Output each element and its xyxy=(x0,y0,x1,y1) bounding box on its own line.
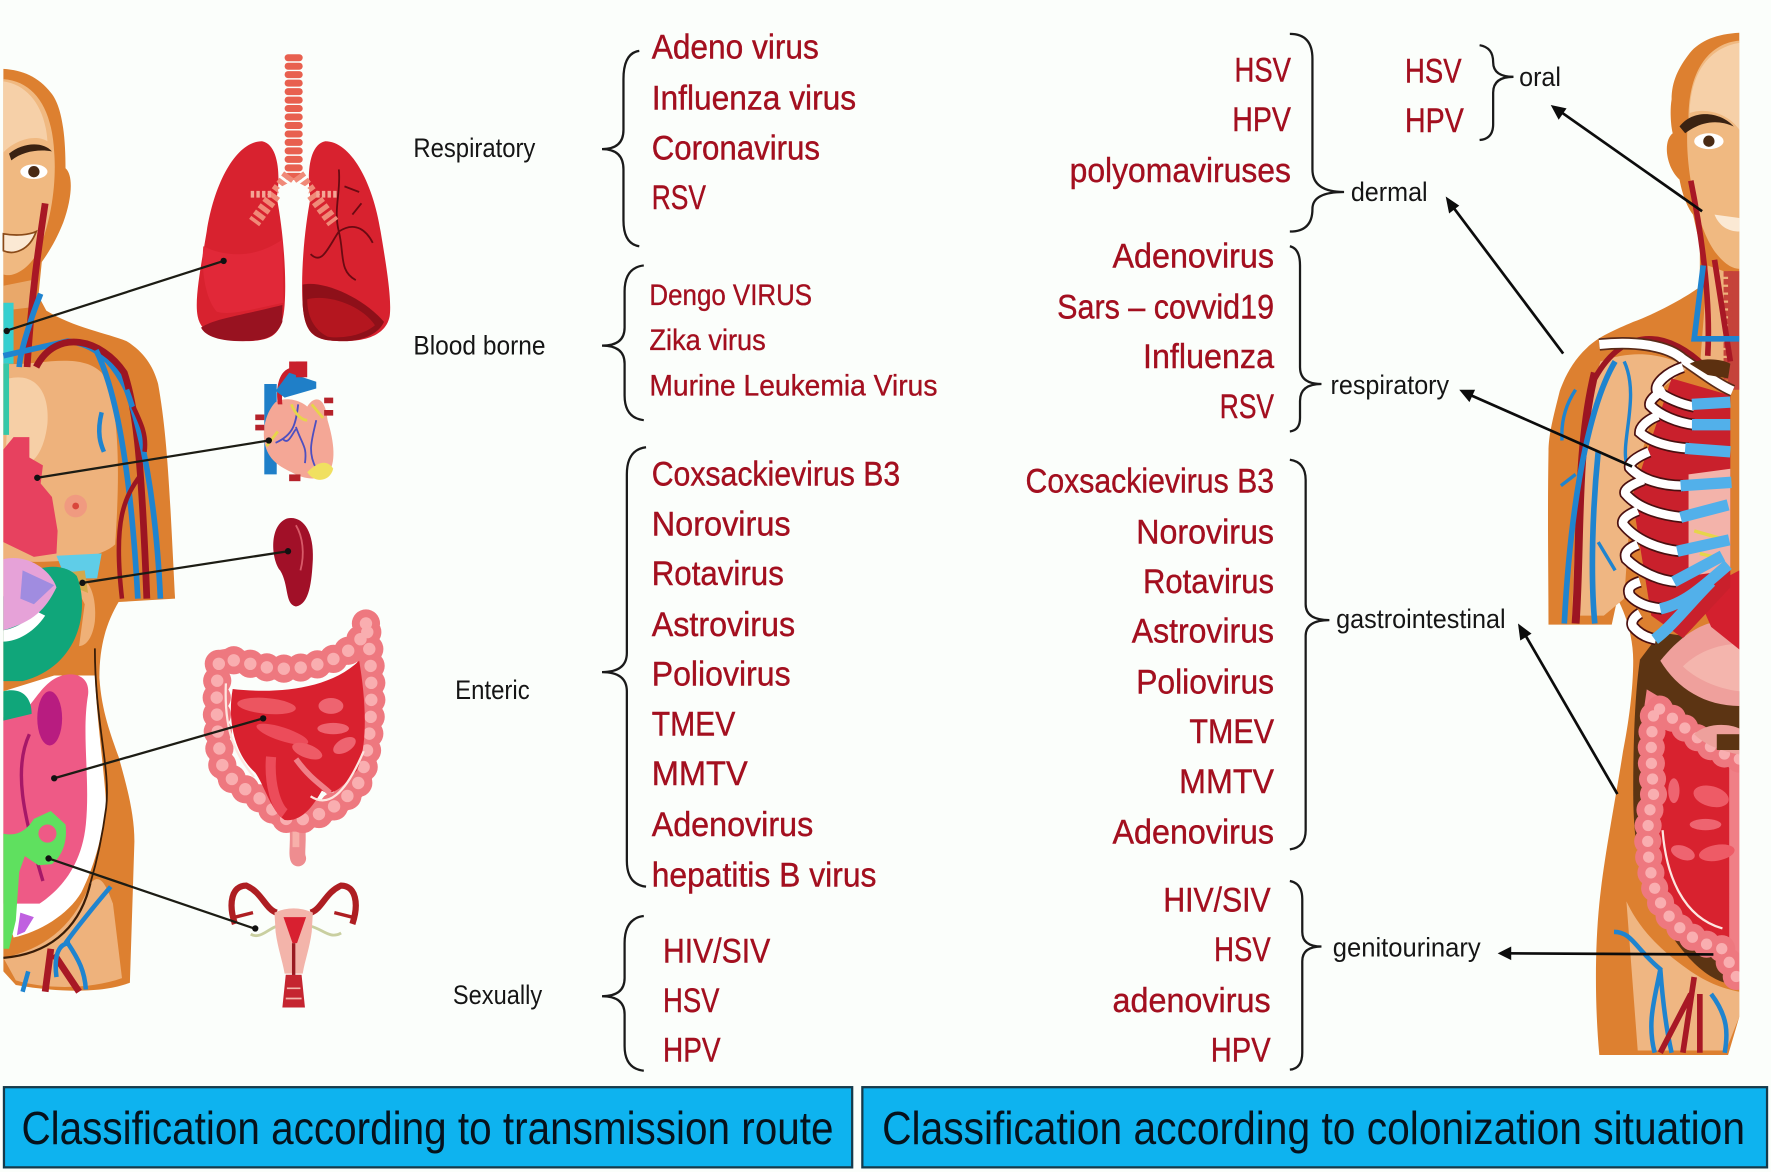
virus list: blood borne: Murine Leukemia Virus xyxy=(649,369,937,402)
virus list: enteric: Rotavirus xyxy=(652,555,784,593)
virus list: gastrointestinal: Coxsackievirus B3 xyxy=(1026,462,1274,500)
clavicle xyxy=(1599,343,1733,391)
category labels: colonization sites: dermal xyxy=(1351,177,1428,207)
virus list: enteric: TMEV xyxy=(652,705,736,743)
body silhouette xyxy=(3,69,175,991)
nipple xyxy=(64,495,87,517)
virus list: respiratory xyxy=(652,29,856,217)
virus list: enteric: Norovirus xyxy=(652,505,791,543)
virus list: enteric xyxy=(652,456,900,895)
category labels: colonization sites: gastrointestinal xyxy=(1336,604,1506,634)
category labels: transmission routes: Respiratory xyxy=(413,133,536,163)
arrow: genitourinary xyxy=(1498,947,1713,960)
category labels: colonization sites xyxy=(1331,62,1561,963)
large intestine xyxy=(1648,706,1739,983)
lower body xyxy=(3,879,122,987)
illustration: left half human body xyxy=(3,69,175,992)
arm vessels xyxy=(36,342,147,599)
virus list: gastrointestinal xyxy=(1026,462,1274,852)
virus list: sexually xyxy=(663,932,771,1070)
ribs xyxy=(1623,367,1694,639)
category labels: transmission routes: Blood borne xyxy=(413,331,546,361)
virus list: genitourinary: HPV xyxy=(1211,1032,1271,1070)
illustration: spleen xyxy=(273,518,313,607)
arrow: respiratory xyxy=(1459,390,1632,466)
eye and brow xyxy=(9,144,52,160)
arrow: oral xyxy=(1551,105,1702,211)
virus list: genitourinary: HSV xyxy=(1214,931,1271,969)
organ: heart shape xyxy=(3,437,58,557)
virus list: enteric: hepatitis B virus xyxy=(652,857,876,895)
virus list: gastrointestinal: Poliovirus xyxy=(1136,664,1274,702)
illustration: heart xyxy=(255,361,334,481)
virus list: enteric: Coxsackievirus B3 xyxy=(652,456,900,494)
rib cartilage xyxy=(1655,402,1731,639)
illustration: intestines xyxy=(217,624,371,858)
colon ring xyxy=(217,624,371,820)
category labels: transmission routes: Enteric xyxy=(455,675,530,705)
virus list: sexually: HIV/SIV xyxy=(663,932,771,970)
virus list: genitourinary: HIV/SIV xyxy=(1163,882,1271,920)
banner: colonization situation xyxy=(862,1087,1767,1167)
category labels: colonization sites: oral xyxy=(1519,62,1561,92)
banner: transmission route xyxy=(4,1087,852,1167)
virus list: colonization respiratory xyxy=(1057,238,1274,426)
virus list: respiratory: Coronavirus xyxy=(652,129,820,167)
trachea xyxy=(285,54,303,180)
category labels: transmission routes: Sexually xyxy=(453,980,543,1010)
virus list: respiratory: RSV xyxy=(652,179,706,217)
white abdomen xyxy=(3,675,106,938)
silhouette xyxy=(1548,33,1739,1055)
organ: liver and stomach xyxy=(56,553,102,578)
virus list: blood borne xyxy=(649,279,937,402)
virus list: sexually: HSV xyxy=(663,982,720,1020)
virus list: enteric: Adenovirus xyxy=(652,806,813,844)
virus list: dermal xyxy=(1070,51,1291,190)
virus list: dermal: HSV xyxy=(1235,51,1291,89)
virus list: gastrointestinal: Norovirus xyxy=(1136,513,1274,551)
arm skin xyxy=(1572,354,1689,616)
arrow: dermal xyxy=(1446,197,1563,354)
neck spine xyxy=(3,303,14,364)
virus list: sexually: HPV xyxy=(663,1032,721,1070)
virus list: oral xyxy=(1405,52,1464,140)
thigh skin and vessels xyxy=(1626,901,1739,1050)
background mask at right edge xyxy=(1739,0,1771,1084)
face xyxy=(1687,41,1739,269)
banner: transmission route: Classification according to transmission route xyxy=(21,1102,834,1154)
pointer lines left xyxy=(4,258,291,932)
liver and stomach xyxy=(1660,621,1739,706)
virus list: enteric: Astrovirus xyxy=(652,606,795,644)
virus list: enteric: MMTV xyxy=(652,755,748,793)
arrow: gastrointestinal xyxy=(1518,624,1617,794)
illustration: lungs xyxy=(197,54,390,341)
virus list: respiratory: Adeno virus xyxy=(652,29,819,67)
virus list: genitourinary: adenovirus xyxy=(1113,982,1271,1020)
virus list: gastrointestinal: Adenovirus xyxy=(1113,814,1274,852)
category labels: colonization sites: respiratory xyxy=(1331,370,1450,400)
virus list: colonization respiratory: Adenovirus xyxy=(1113,238,1274,276)
virus list: gastrointestinal: Rotavirus xyxy=(1143,563,1274,601)
illustration: right half human body xyxy=(1548,33,1739,1055)
virus list: enteric: Poliovirus xyxy=(652,656,791,694)
virus list: oral: HSV xyxy=(1405,52,1462,90)
illustration: uterus xyxy=(232,886,356,1008)
virus list: gastrointestinal: TMEV xyxy=(1189,713,1274,751)
organ: intestines xyxy=(3,674,88,904)
virus list: gastrointestinal: MMTV xyxy=(1179,763,1274,801)
virus list: oral: HPV xyxy=(1405,102,1464,140)
category labels: colonization sites: genitourinary xyxy=(1333,933,1481,963)
virus list: gastrointestinal: Astrovirus xyxy=(1132,613,1274,651)
bronchi xyxy=(254,175,333,223)
body cavity xyxy=(1633,633,1739,985)
neck xyxy=(1700,265,1739,367)
virus list: colonization respiratory: RSV xyxy=(1220,388,1274,426)
chest skin xyxy=(3,361,118,562)
virus list: blood borne: Zika virus xyxy=(649,324,766,357)
neck vessels xyxy=(27,203,45,367)
face skin xyxy=(3,79,55,275)
virus list: dermal: polyomaviruses xyxy=(1070,152,1291,190)
organ: uterus shape xyxy=(3,811,66,949)
category labels: transmission routes xyxy=(413,133,546,1010)
small intestine xyxy=(231,661,365,820)
braces left xyxy=(602,51,646,1071)
virus list: colonization respiratory: Influenza xyxy=(1143,338,1274,376)
lungs under ribs xyxy=(1632,378,1730,638)
virus list: respiratory: Influenza virus xyxy=(652,80,856,118)
virus list: dermal: HPV xyxy=(1232,101,1291,139)
arm vessels xyxy=(1576,373,1595,624)
virus list: genitourinary xyxy=(1113,882,1271,1070)
virus list: colonization respiratory: Sars – covvid19 xyxy=(1057,289,1274,327)
braces right xyxy=(1290,34,1513,1070)
virus list: blood borne: Dengo VIRUS xyxy=(649,279,812,312)
